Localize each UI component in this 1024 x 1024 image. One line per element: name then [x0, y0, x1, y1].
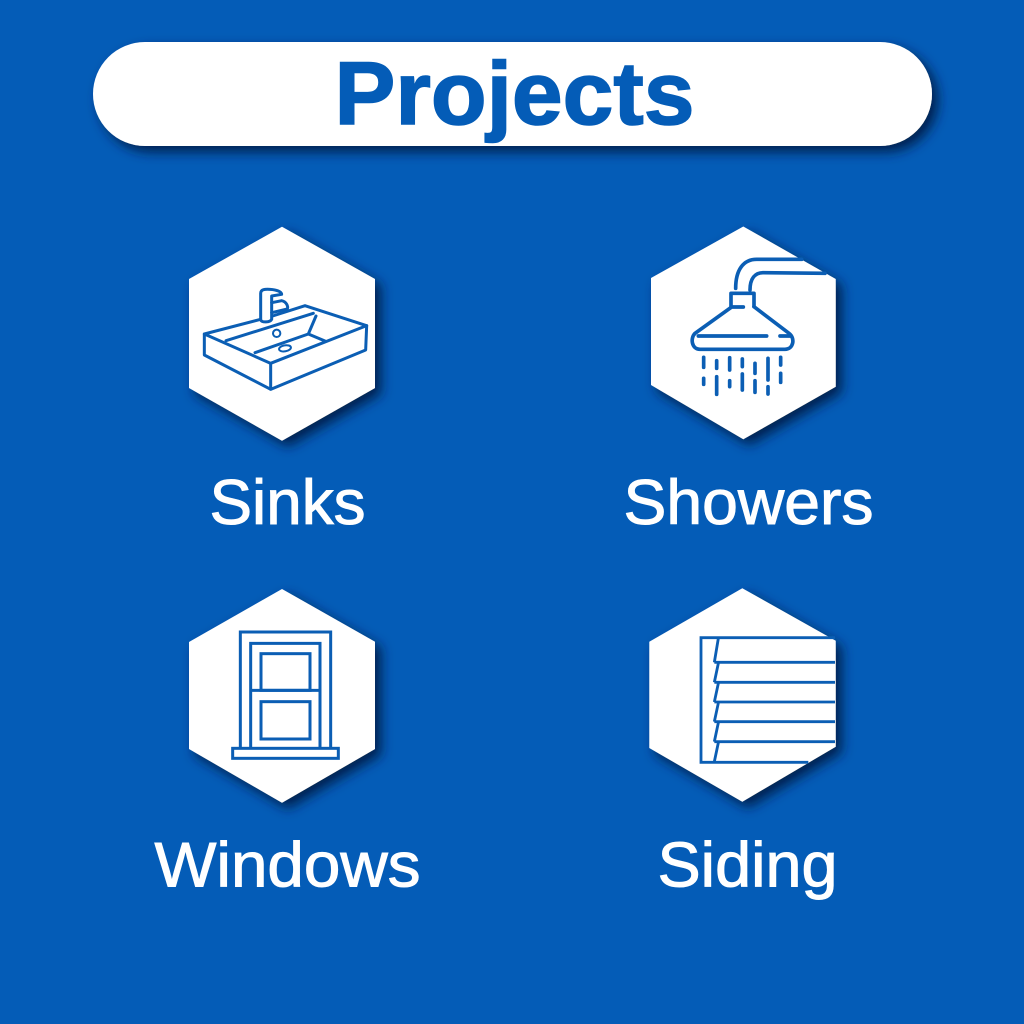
title banner — [93, 42, 932, 146]
label: windows: Windows — [154, 830, 420, 900]
icon: siding — [701, 638, 835, 762]
icon: sink — [204, 289, 367, 389]
panel: sinks — [189, 227, 375, 538]
label: sinks: Sinks — [210, 468, 366, 538]
panel: windows — [154, 589, 420, 900]
icon: shower — [692, 259, 825, 394]
label: showers: Showers — [624, 468, 874, 538]
icon: window — [233, 632, 338, 758]
panel: showers — [624, 226, 874, 538]
title: Projects — [334, 43, 694, 143]
panel: siding — [649, 588, 838, 900]
label: siding: Siding — [658, 830, 838, 900]
